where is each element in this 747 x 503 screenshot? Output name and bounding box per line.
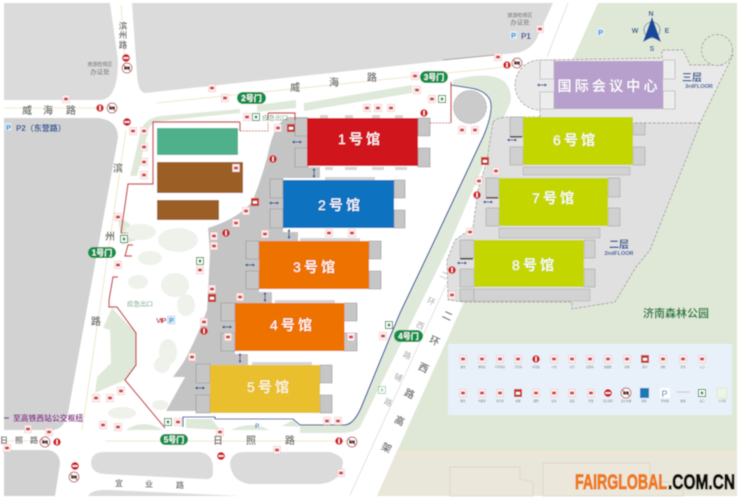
permit office labels: 办证处 bbox=[510, 18, 530, 26]
ring elevated road label: 二 bbox=[439, 270, 450, 282]
emergency exit labels: 应急出口 bbox=[127, 299, 153, 308]
legend row 2 bbox=[460, 388, 727, 403]
ring elevated road label: 西 bbox=[416, 361, 430, 376]
roundabout plaza bbox=[454, 90, 486, 124]
road labels: 宜 bbox=[115, 478, 123, 488]
road labels: 州 bbox=[105, 231, 115, 243]
upper floor complex: halls 6 to 8 bbox=[447, 117, 700, 309]
ring elevated road label: 西 bbox=[415, 320, 426, 332]
road labels: 照 bbox=[246, 435, 256, 447]
gate 5: 5号门 bbox=[164, 434, 184, 444]
blue shuttle route bbox=[183, 85, 491, 427]
hall 7: 7号馆 bbox=[532, 190, 574, 206]
road labels: 日 bbox=[0, 436, 8, 445]
legend panel bbox=[448, 344, 732, 415]
legend row 2: 禁止通行 bbox=[603, 399, 614, 403]
emergency exit labels: 应急出口 bbox=[262, 113, 288, 122]
road centre lines bbox=[4, 5, 525, 441]
legend row 1: 餐饮 bbox=[460, 365, 466, 369]
legend row 2: 残障 bbox=[533, 399, 539, 403]
ring elevated road label: 高 bbox=[392, 413, 407, 429]
legend row 2: 禁止车辆 bbox=[621, 399, 632, 403]
floor labels bbox=[604, 72, 713, 257]
legend row 2: P bbox=[662, 389, 668, 399]
hall 8 bbox=[474, 240, 584, 287]
ring elevated road label: 二 bbox=[440, 310, 454, 324]
FAIRGLOBAL watermark: FAIRGLOBAL bbox=[575, 471, 667, 494]
legend row 2: 停靠 bbox=[588, 399, 594, 403]
gate 2: 2号门 bbox=[241, 93, 262, 103]
bus hub label: 至高铁西站公交枢纽 bbox=[13, 413, 83, 423]
hall 2: 2号馆 bbox=[318, 197, 360, 213]
legend row 2: 货运 bbox=[569, 399, 575, 403]
road labels: 日 bbox=[213, 435, 223, 447]
hall 1 bbox=[307, 118, 418, 166]
legend row 2: 电梯 bbox=[515, 399, 521, 403]
road labels: 路 bbox=[367, 71, 377, 84]
international conference centre: 国际会议中心 bbox=[558, 78, 658, 94]
forest park label: 济南森林公园 bbox=[643, 306, 709, 320]
legend row 1: 入口 bbox=[699, 365, 705, 369]
road labels: 照 bbox=[15, 436, 23, 445]
permit office labels: 旅游检规区 bbox=[507, 12, 533, 19]
legend row 1: 便利店 bbox=[478, 365, 486, 369]
legend row 2: 洗手间 bbox=[496, 399, 504, 403]
gate 1: 1号门 bbox=[92, 248, 112, 258]
legend row 1: 票务 bbox=[680, 365, 686, 369]
hall 7 bbox=[499, 178, 608, 226]
gray concourse: halls 1 to 5 bbox=[166, 117, 320, 411]
ring elevated road label: 环 bbox=[426, 296, 437, 308]
permit office labels: 旅游检规区 bbox=[87, 61, 113, 68]
ring elevated road label: 路 bbox=[383, 396, 394, 409]
legend row 2: 停车场 bbox=[661, 399, 669, 403]
road labels: 威 bbox=[290, 81, 300, 94]
road labels: 路 bbox=[91, 315, 101, 328]
legend row 2: 路线 bbox=[680, 399, 686, 403]
legend row 1: 行李寄存 bbox=[495, 365, 506, 369]
red walking route bbox=[109, 82, 451, 428]
hall 6 bbox=[523, 117, 633, 165]
hall 4 bbox=[235, 303, 344, 351]
hall side wings bbox=[196, 118, 430, 413]
ring elevated road label: 架 bbox=[379, 440, 394, 456]
road labels: 滨 bbox=[113, 162, 123, 175]
road labels: 海 bbox=[329, 76, 339, 89]
city blocks bbox=[4, 3, 553, 496]
road labels: 路 bbox=[66, 104, 76, 117]
road labels: 路 bbox=[176, 480, 184, 490]
parking labels: P bbox=[6, 123, 11, 132]
ring elevated road label: 辅 bbox=[393, 371, 404, 384]
gate 5 bbox=[160, 434, 188, 445]
compass: N bbox=[648, 11, 654, 18]
road labels: 路 bbox=[285, 434, 295, 447]
hall 5 bbox=[210, 365, 320, 413]
ring elevated road label: 路 bbox=[402, 349, 413, 362]
legend row 1: 消防 bbox=[660, 365, 666, 369]
international conference centre bbox=[554, 61, 663, 109]
legend row 1: 问讯处 bbox=[532, 365, 540, 369]
legend row 2: 地铁 bbox=[641, 399, 647, 403]
permit office labels: 办证处 bbox=[90, 67, 110, 76]
VIP parking: VIP bbox=[156, 316, 166, 325]
legend row 2: 人行道 bbox=[718, 399, 726, 403]
parking labels: P1 bbox=[521, 32, 531, 41]
hall 8: 8号馆 bbox=[512, 257, 554, 273]
hall 5: 5号馆 bbox=[247, 379, 289, 395]
light park blobs bbox=[108, 224, 198, 419]
gate 4: 4号门 bbox=[398, 331, 419, 341]
legend row 1: 吸烟区 bbox=[604, 365, 612, 369]
parking labels: P bbox=[511, 31, 516, 40]
VIP parking: P bbox=[169, 318, 174, 325]
hall 3 bbox=[259, 241, 369, 289]
parking labels: P bbox=[255, 423, 260, 430]
hall 6: 6号馆 bbox=[553, 132, 595, 148]
ring elevated road label: 路 bbox=[402, 386, 417, 402]
gate 3 bbox=[420, 71, 448, 83]
parking labels bbox=[5, 28, 604, 430]
legend row 2: 母婴室 bbox=[478, 399, 486, 403]
legend row 1: 扶梯 bbox=[624, 365, 630, 369]
gate 1 bbox=[88, 247, 116, 258]
permit office labels bbox=[87, 12, 533, 76]
hall top and bottom dashes bbox=[252, 115, 407, 365]
VIP parking bbox=[156, 316, 175, 325]
legend row 1 bbox=[460, 355, 706, 369]
hall 4: 4号馆 bbox=[270, 317, 312, 333]
road labels: 路 bbox=[30, 435, 38, 445]
compass bbox=[632, 11, 670, 53]
gate 3: 3号门 bbox=[424, 72, 444, 82]
emergency exit labels bbox=[127, 113, 288, 308]
road labels: 海 bbox=[43, 104, 53, 117]
hall 2 bbox=[283, 180, 394, 228]
green belts bbox=[95, 75, 511, 433]
floor labels: 二层 bbox=[609, 239, 629, 251]
gate 4 bbox=[394, 330, 423, 342]
hall 3: 3号馆 bbox=[293, 259, 335, 275]
ring elevated road label: 环 bbox=[427, 334, 441, 349]
map icons bbox=[4, 25, 544, 482]
legend row 2: 饮水 bbox=[551, 399, 557, 403]
legend row 1: 大巴 bbox=[569, 365, 575, 369]
floor labels: 2ndFLOOR bbox=[604, 251, 634, 257]
legend row 1: 医疗 bbox=[642, 365, 648, 369]
road labels: 州 bbox=[119, 30, 127, 40]
hall 1: 1号馆 bbox=[338, 131, 380, 147]
road labels: 滨 bbox=[119, 21, 128, 31]
gate 2 bbox=[237, 92, 266, 104]
compass: W bbox=[632, 28, 639, 35]
road labels: 路 bbox=[119, 40, 128, 50]
legend row 1: 卫生间 bbox=[514, 365, 522, 369]
parking labels: P bbox=[598, 28, 603, 37]
southern district strip bbox=[377, 451, 737, 496]
compass: E bbox=[665, 28, 670, 35]
forest park ground bbox=[377, 3, 737, 496]
passage arrows bbox=[195, 83, 547, 390]
road labels: 业 bbox=[145, 479, 153, 489]
conference centre floor bbox=[515, 34, 733, 123]
exhibition plots bbox=[157, 128, 243, 220]
compass: S bbox=[650, 46, 655, 53]
parking labels: P2（东营路） bbox=[16, 123, 66, 133]
legend row 2: 出口 bbox=[699, 399, 705, 403]
legend row 1: 公交 bbox=[551, 365, 557, 369]
road labels: 威 bbox=[22, 104, 32, 117]
floor labels: 三层 bbox=[682, 72, 702, 84]
legend row 2: 服务 bbox=[460, 399, 466, 403]
legend row 1: 出租车 bbox=[586, 365, 594, 369]
road labels bbox=[0, 21, 377, 490]
floor labels: 3rdFLOOR bbox=[685, 84, 713, 90]
ring elevated road label bbox=[379, 270, 454, 456]
